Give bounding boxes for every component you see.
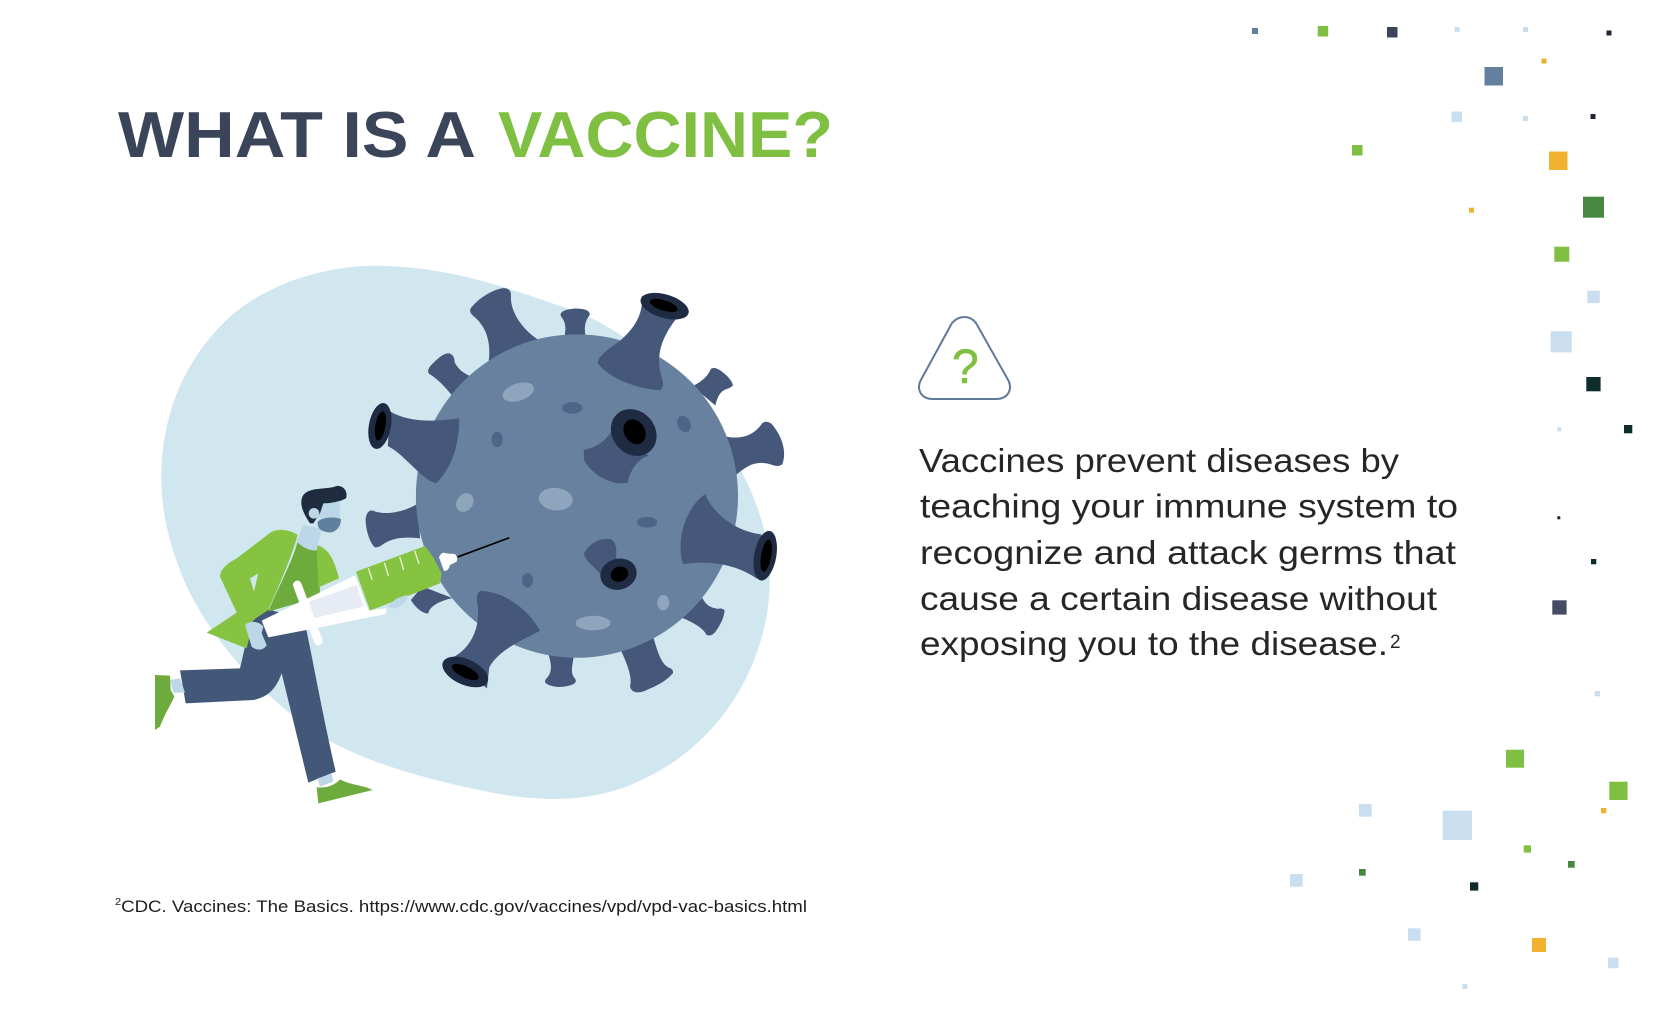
body text: Vaccines prevent diseases by bbox=[919, 442, 1400, 479]
title: WHAT IS A bbox=[118, 98, 476, 171]
background blob bbox=[161, 266, 770, 799]
man with syringe bbox=[155, 486, 509, 803]
jacket bbox=[207, 530, 298, 648]
syringe bbox=[262, 575, 387, 637]
body text: cause a certain disease without bbox=[920, 580, 1437, 617]
title: VACCINE? bbox=[498, 98, 833, 171]
icon: question mark in triangle bbox=[919, 317, 1010, 399]
body text: exposing you to the disease. bbox=[920, 625, 1388, 662]
shirt bbox=[268, 542, 320, 612]
head bbox=[297, 525, 322, 550]
hands bbox=[245, 622, 267, 650]
body text: recognize and attack germs that bbox=[920, 534, 1456, 571]
virus bbox=[365, 288, 784, 694]
illustration: man injecting virus with syringe bbox=[155, 266, 784, 803]
body text: 2 bbox=[1390, 632, 1401, 653]
footnote: CDC. Vaccines: The Basics. https://www.cdc.gov/vaccines/vpd/vpd-vac-basics.html bbox=[121, 897, 807, 916]
body text bbox=[919, 442, 1458, 662]
decorative squares: lower right bbox=[1290, 516, 1628, 989]
footnote: 2 bbox=[115, 897, 122, 908]
shoes bbox=[155, 675, 174, 730]
decorative squares: top right bbox=[1252, 26, 1632, 433]
body text: teaching your immune system to bbox=[920, 488, 1458, 524]
legs bbox=[180, 609, 336, 783]
title bbox=[118, 98, 833, 171]
icon: question mark in triangle: ? bbox=[952, 341, 979, 394]
